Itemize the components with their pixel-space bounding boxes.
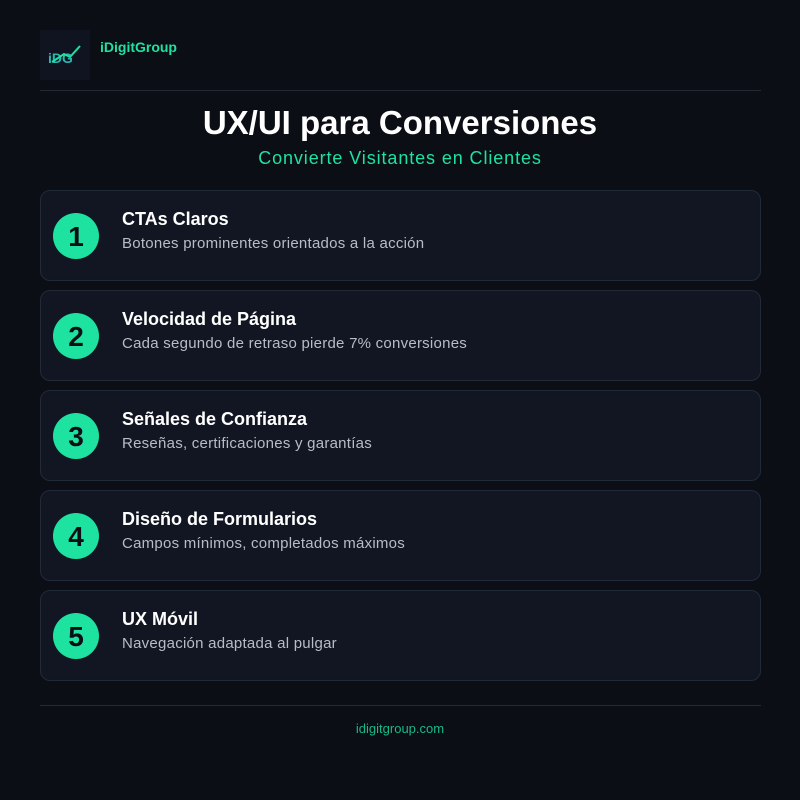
card 4 [40,490,761,581]
card 5: 5 [68,621,84,652]
card 3 [40,390,761,481]
card 5 [40,590,761,681]
card 5: UX Móvil [122,609,198,629]
card 1: 1 [68,221,84,252]
card 1: CTAs Claros [122,209,229,229]
card 2: Cada segundo de retraso pierde 7% conversiones [122,335,467,352]
card 4: Diseño de Formularios [122,509,317,529]
logo: iDG [48,50,73,66]
card 5: Navegación adaptada al pulgar [122,635,337,652]
card 2: 2 [68,321,84,352]
card 4: Campos mínimos, completados máximos [122,535,405,552]
card 3: Reseñas, certificaciones y garantías [122,435,372,452]
card 1: Botones prominentes orientados a la acción [122,235,424,252]
footer: idigitgroup.com [356,721,444,736]
card 3: 3 [68,421,84,452]
logo [40,30,90,80]
subtitle: Convierte Visitantes en Clientes [258,148,542,168]
card 4: 4 [68,521,84,552]
card 1 [40,190,761,281]
card 2: Velocidad de Página [122,309,296,329]
brand name: iDigitGroup [100,39,177,55]
card 2 [40,290,761,381]
title: UX/UI para Conversiones [203,104,597,141]
card 3: Señales de Confianza [122,409,307,429]
